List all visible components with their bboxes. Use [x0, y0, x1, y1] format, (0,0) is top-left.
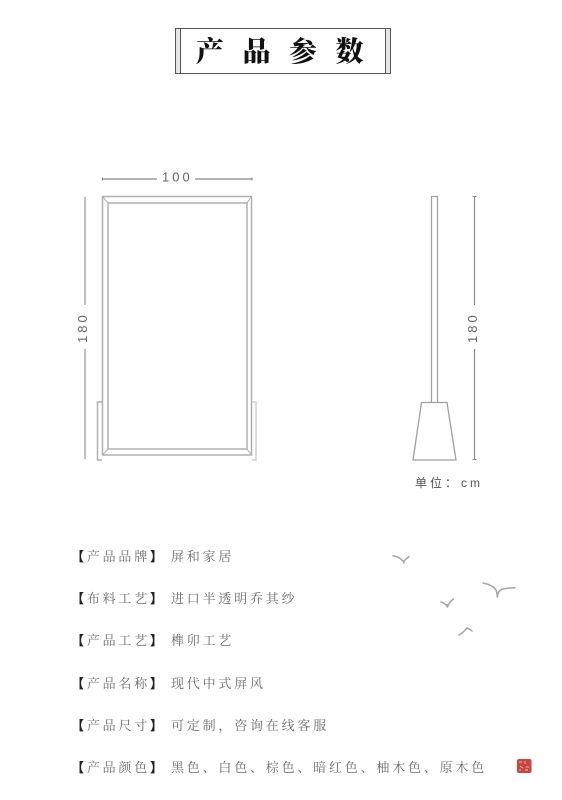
width dimension 100: [102, 170, 252, 184]
spec: craft: 榫卯工艺: [171, 633, 234, 648]
front view of screen: [98, 196, 256, 460]
spec: craft: 【产品工艺】: [71, 630, 166, 649]
title text: 产品参数: [196, 30, 382, 70]
spec: fabric: 进口半透明乔其纱: [171, 591, 297, 606]
height dimension right 180: [465, 196, 480, 460]
spec: brand: 屏和家居: [171, 549, 234, 564]
spec: brand: 【产品品牌】: [71, 546, 166, 565]
height dimension right 180: 180: [465, 312, 480, 343]
width dimension 100: 100: [162, 170, 193, 184]
spec: fabric: 【布料工艺】: [71, 588, 166, 607]
spec: size: 【产品尺寸】: [71, 715, 166, 734]
left foot: [98, 402, 102, 460]
spec: size: 可定制，咨询在线客服: [171, 718, 329, 734]
title banner: [176, 28, 390, 74]
unit label: 单位：: [415, 476, 460, 490]
spec: colours: 【产品颜色】: [71, 757, 166, 776]
spec: colours: 黑色、白色、棕色、暗红色、柚木色、原木色: [171, 760, 487, 775]
side view of screen: [413, 196, 456, 460]
icon: flying birds: [393, 556, 515, 635]
height dimension left 180: 180: [75, 312, 90, 343]
spec: name: 现代中式屏风: [171, 676, 266, 691]
unit label: cm: [461, 476, 483, 490]
spec: name: 【产品名称】: [71, 673, 166, 692]
side view base: [413, 402, 456, 460]
right foot: [252, 402, 256, 460]
icon: red seal: [517, 759, 532, 773]
